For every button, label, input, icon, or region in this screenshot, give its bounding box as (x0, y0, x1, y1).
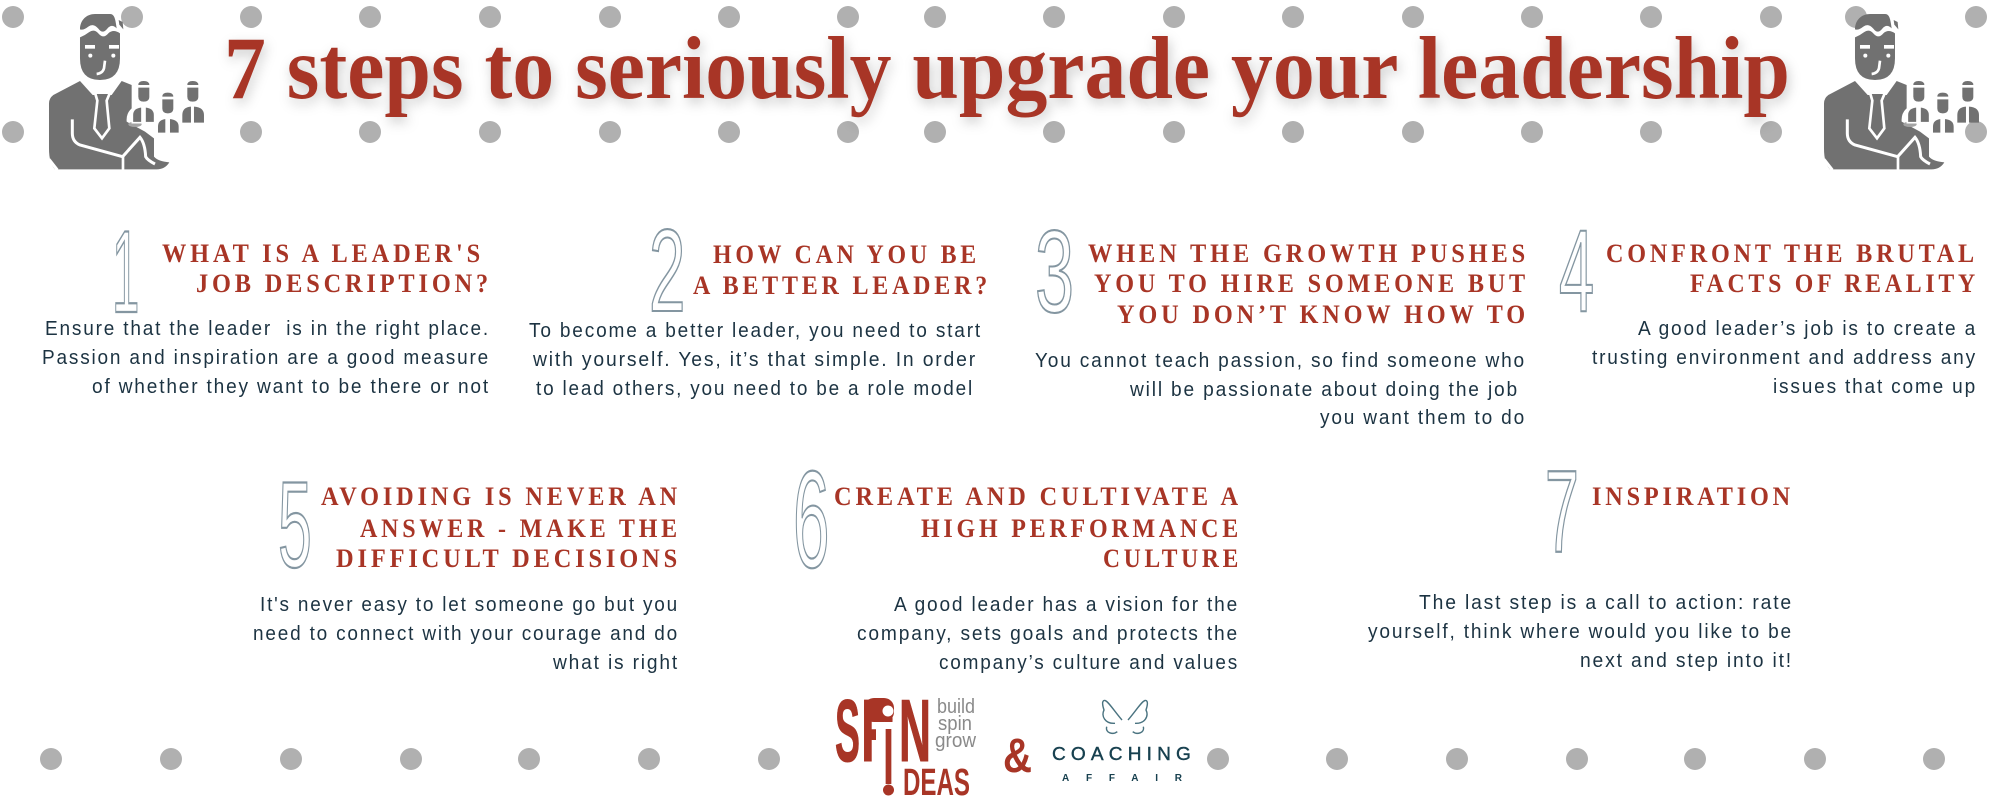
icon: leader with team right (1824, 14, 1979, 170)
step 2 text: to lead others, you need to be a role model (536, 378, 974, 400)
number 3: 3 (1035, 208, 1074, 337)
step 5 (253, 455, 681, 674)
logo: Spin Ideas (835, 681, 977, 800)
step 3 text: you want them to do (1320, 407, 1526, 429)
step 6 heading: HIGH PERFORMANCE (921, 513, 1242, 543)
step 3 heading: YOU TO HIRE SOMEONE BUT (1094, 268, 1529, 298)
step 3 text (1035, 350, 1526, 429)
step 3 heading: WHEN THE GROWTH PUSHES (1088, 238, 1529, 268)
step 3 heading (1088, 238, 1529, 329)
logo: Spin Ideas: build (937, 696, 975, 718)
logo: Spin Ideas: I (883, 712, 894, 800)
step 1 heading (162, 238, 492, 298)
step 1 text (42, 318, 490, 398)
number 1: 1 (112, 208, 139, 338)
step 2 text (529, 320, 982, 400)
step 4 text: A good leader’s job is to create a (1638, 318, 1977, 340)
step 4 text: trusting environment and address any (1592, 347, 1977, 369)
step 5 heading: DIFFICULT DECISIONS (336, 543, 681, 573)
step 6 text: company, sets goals and protects the (857, 623, 1239, 645)
logo: Spin Ideas: spin (938, 713, 972, 735)
number 7: 7 (1545, 447, 1579, 577)
step 1 text: Passion and inspiration are a good measure (42, 347, 490, 369)
number 6: 6 (793, 442, 829, 596)
step 5 heading (321, 481, 681, 573)
step 7 text: yourself, think where would you like to be (1368, 621, 1793, 643)
step 5 text: what is right (552, 652, 679, 674)
title: 7 steps to seriously upgrade your leadership (224, 20, 1790, 118)
step 3 (1035, 208, 1529, 429)
step 1 (42, 208, 492, 398)
step 4 text (1592, 318, 1977, 398)
step 6 heading (834, 481, 1242, 573)
logo: Coaching Affair (1052, 700, 1196, 784)
step 6 heading: CULTURE (1103, 543, 1242, 573)
step 1 heading: WHAT IS A LEADER'S (162, 238, 484, 268)
icon: leader with team left (49, 14, 204, 170)
step 5 text: It's never easy to let someone go but you (260, 594, 679, 616)
step 2 text: To become a better leader, you need to start (529, 320, 982, 342)
logo: Spin Ideas: S (835, 681, 860, 780)
bottom dot row (40, 748, 1945, 770)
step 6 text: company’s culture and values (939, 652, 1239, 674)
step 2 heading (693, 239, 991, 300)
step 3 heading: YOU DON’T KNOW HOW TO (1117, 299, 1529, 329)
second dot row (2, 121, 1987, 143)
step 7 text (1368, 592, 1793, 672)
step 5 text (253, 594, 679, 674)
number 2: 2 (649, 206, 685, 337)
step 6 text (857, 594, 1239, 674)
top dot row (2, 6, 1987, 28)
step 1 text: of whether they want to be there or not (92, 376, 490, 398)
logo: Coaching Affair: COACHING (1052, 743, 1196, 764)
step 5 text: need to connect with your courage and do (253, 623, 679, 645)
step 4 heading (1606, 238, 1979, 298)
logo: Coaching Affair: AFFAIR (1062, 773, 1186, 784)
step 7 (1368, 447, 1794, 672)
step 1 heading: JOB DESCRIPTION? (196, 268, 492, 298)
number 4: 4 (1559, 205, 1594, 336)
ampersand: & (1003, 730, 1032, 783)
step 6 text: A good leader has a vision for the (894, 594, 1239, 616)
step 2 heading: HOW CAN YOU BE (713, 239, 980, 269)
number 5: 5 (278, 455, 312, 594)
step 7 text: next and step into it! (1580, 650, 1793, 672)
step 5 heading: AVOIDING IS NEVER AN (321, 481, 681, 511)
step 3 text: You cannot teach passion, so find someone who (1035, 350, 1526, 372)
step 2 text: with yourself. Yes, it’s that simple. In order (532, 349, 977, 371)
step 1 text: Ensure that the leader is in the right place. (45, 318, 490, 340)
logo: Spin Ideas: grow (935, 730, 977, 752)
step 2 (529, 206, 991, 400)
step 4 text: issues that come up (1773, 376, 1977, 398)
step 5 heading: ANSWER - MAKE THE (360, 513, 681, 543)
step 2 heading: A BETTER LEADER? (693, 270, 991, 300)
logo: Spin Ideas: P (861, 681, 894, 780)
step 4 (1559, 205, 1979, 398)
step 6 heading: CREATE AND CULTIVATE A (834, 481, 1242, 511)
logo: Spin Ideas: N (899, 681, 931, 780)
step 7 heading: INSPIRATION (1592, 481, 1794, 511)
step 6 (793, 442, 1242, 674)
step 7 text: The last step is a call to action: rate (1419, 592, 1793, 614)
step 3 text: will be passionate about doing the job (1129, 379, 1519, 401)
icon: butterfly (1103, 700, 1147, 733)
